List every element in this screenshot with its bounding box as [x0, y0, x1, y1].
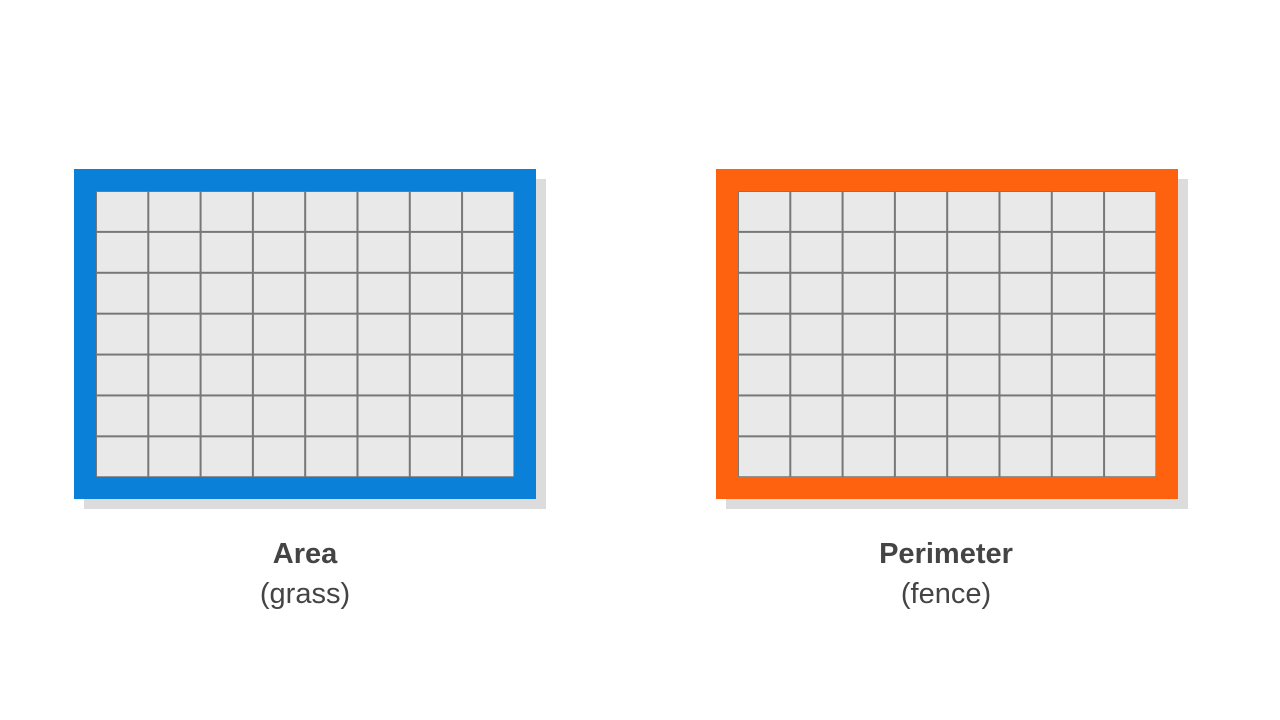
label: area: (grass) [260, 578, 350, 610]
label: perimeter: (fence) [901, 578, 991, 610]
panel: area rectangle [74, 169, 536, 499]
label: area: Area [273, 538, 337, 570]
panel: perimeter rectangle [716, 169, 1178, 499]
label: perimeter: Perimeter [879, 538, 1013, 570]
label: perimeter [879, 538, 1013, 610]
label: area [260, 538, 350, 610]
